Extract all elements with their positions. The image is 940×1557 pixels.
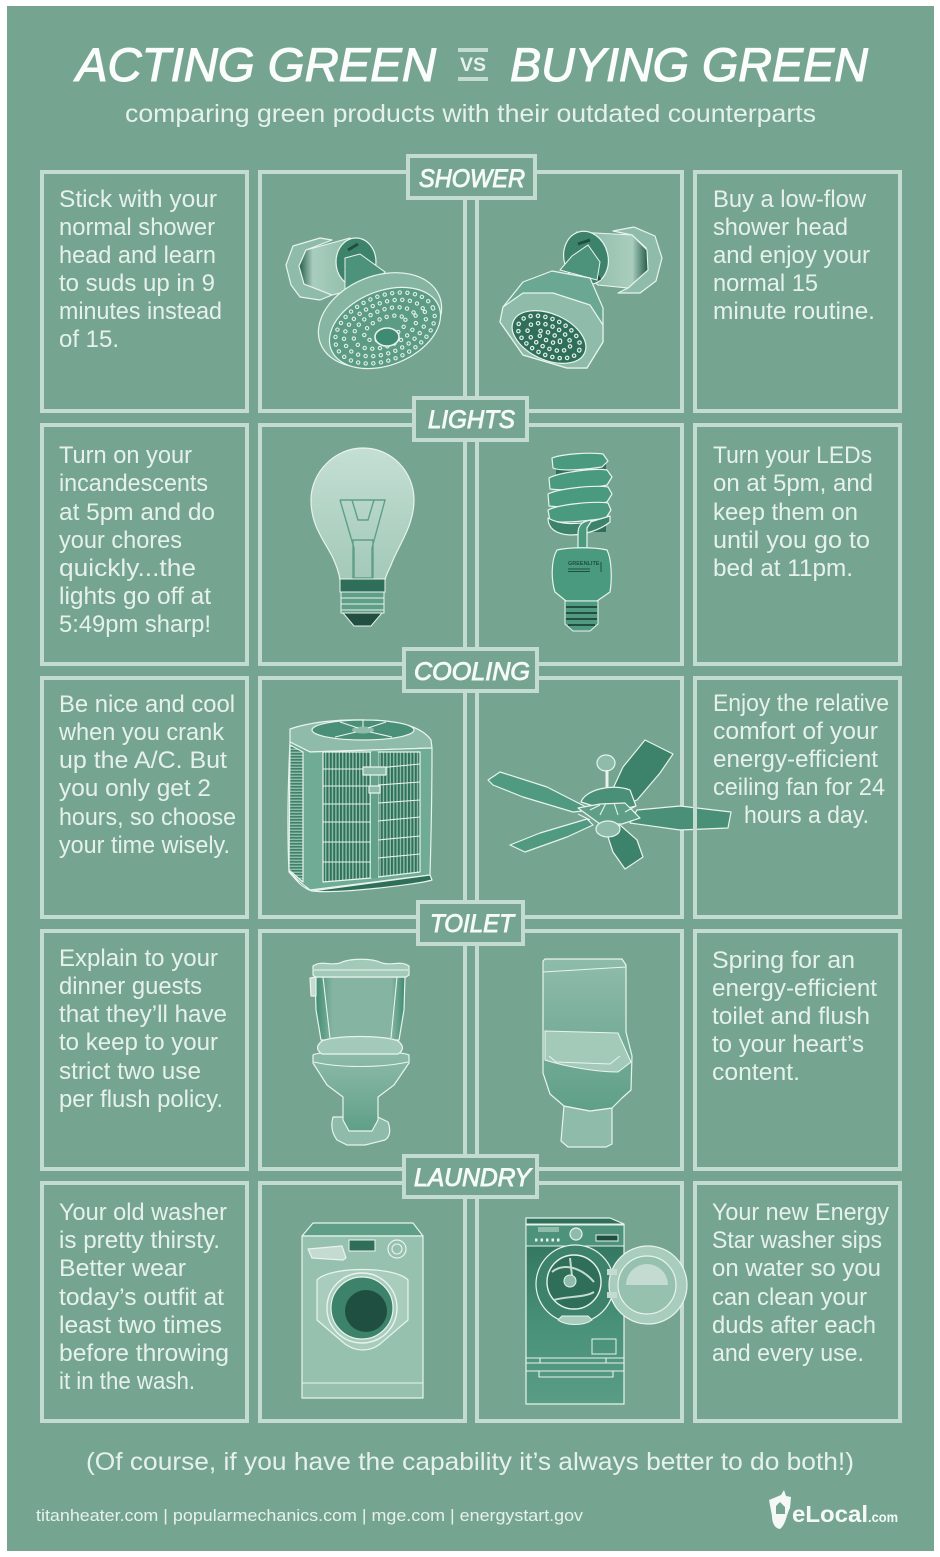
label: cooling: [404, 649, 537, 691]
panel: cooling green product: [477, 678, 731, 917]
panel: shower acting text: [42, 172, 247, 411]
icon: efficient washer with open door: [526, 1218, 687, 1404]
panel: toilet green text: to your heart’s: [712, 1031, 864, 1058]
panel: laundry acting text: today’s outfit at: [59, 1284, 224, 1311]
panel: cooling acting text: [42, 678, 247, 917]
panel: lights green text: until you go to: [713, 527, 870, 554]
icon: ceiling fan: [488, 740, 731, 869]
icon: efficient toilet: [543, 959, 632, 1147]
panel: laundry acting text: least two times: [59, 1312, 222, 1339]
logo: eLocal: .com: [868, 1510, 898, 1525]
panel: toilet acting text: [42, 931, 247, 1169]
subtitle: comparing green products with their outdated counterparts: [125, 100, 816, 128]
icon: CFL spiral bulb: GREENLITE: [568, 561, 600, 567]
panel: toilet green text: toilet and flush: [712, 1003, 870, 1030]
panel: lights acting text: incandescents: [59, 470, 208, 497]
panel: cooling green text: Enjoy the relative: [713, 690, 889, 717]
label: shower: [408, 156, 535, 198]
panel: shower green text: minute routine.: [713, 298, 875, 325]
panel: shower green text: and enjoy your: [713, 242, 870, 269]
label: toilet: TOILET: [430, 910, 516, 938]
panel: cooling acting text: hours, so choose: [59, 804, 236, 831]
label: laundry: LAUNDRY: [414, 1164, 533, 1192]
panel: toilet acting text: to keep to your: [59, 1029, 218, 1056]
panel: shower green product: [477, 172, 682, 411]
panel: shower acting text: to suds up in 9: [59, 270, 215, 297]
panel: lights acting text: lights go off at: [59, 583, 211, 610]
label: cooling: COOLING: [414, 658, 530, 686]
label: lights: LIGHTS: [428, 406, 515, 434]
panel: lights green text: keep them on: [713, 499, 858, 526]
panel: cooling acting text: your time wisely.: [59, 832, 230, 859]
panel: shower acting text: Stick with your: [59, 186, 217, 213]
panel: cooling acting text: you only get 2: [59, 775, 211, 802]
panel: shower acting text: minutes instead: [59, 298, 222, 325]
panel: shower green text: normal 15: [713, 270, 818, 297]
logo: eLocal: [769, 1490, 898, 1529]
panel: cooling green text: energy-efficient: [713, 746, 878, 773]
panel: cooling green text: ceiling fan for 24: [713, 774, 885, 801]
panel: laundry acting text: [42, 1183, 247, 1421]
panel: laundry green text: on water so you: [712, 1255, 881, 1282]
panel: cooling acting text: when you crank: [58, 719, 225, 746]
panel: laundry green text: [695, 1183, 900, 1421]
panel: toilet acting text: that they’ll have: [59, 1001, 227, 1028]
icon: low-flow shower head: [500, 226, 662, 374]
panel: toilet green text: energy-efficient: [712, 975, 877, 1002]
label: shower: SHOWER: [419, 165, 525, 193]
panel: toilet acting text: Explain to your: [59, 945, 218, 972]
panel: laundry acting text: is pretty thirsty.: [59, 1227, 220, 1254]
panel: laundry green text: duds after each: [712, 1312, 876, 1339]
panel: lights acting text: Turn on your: [59, 442, 192, 469]
panel: toilet acting text: strict two use: [59, 1058, 201, 1085]
panel: lights old product: [260, 425, 465, 664]
label: lights: [414, 398, 527, 440]
panel: shower acting text: of 15.: [59, 326, 119, 353]
panel: toilet old product: [260, 931, 465, 1169]
icon: old toilet: [310, 959, 409, 1145]
panel: laundry green text: and every use.: [712, 1340, 864, 1367]
panel: laundry acting text: before throwing: [59, 1340, 229, 1367]
title: BUYING GREEN: [510, 38, 868, 91]
panel: laundry green text: Your new Energy: [712, 1199, 889, 1226]
label: laundry: [404, 1156, 537, 1197]
panel: cooling old product: [260, 678, 465, 917]
panel: lights acting text: 5:49pm sharp!: [59, 611, 211, 638]
panel: cooling acting text: Be nice and cool: [59, 691, 235, 718]
panel: cooling acting text: up the A/C. But: [59, 747, 227, 774]
icon: old washer: [302, 1223, 423, 1398]
icon: CFL spiral bulb: [548, 453, 612, 631]
panel: laundry green text: Star washer sips: [712, 1227, 882, 1254]
panel: lights green text: bed at 11pm.: [713, 555, 853, 582]
panel: lights acting text: at 5pm and do: [59, 499, 215, 526]
icon: incandescent bulb: [311, 448, 414, 626]
panel: lights green product: [477, 425, 682, 664]
panel: shower old product: [260, 172, 465, 411]
panel: laundry acting text: Better wear: [59, 1255, 186, 1282]
panel: laundry old product: [260, 1183, 465, 1421]
panel: laundry acting text: Your old washer: [59, 1199, 227, 1226]
title: VS: [460, 55, 486, 76]
logo: eLocal: eLocal: [792, 1501, 868, 1527]
closing note: (Of course, if you have the capability it’s always better to do both!): [86, 1448, 854, 1476]
panel: laundry green text: can clean your: [712, 1284, 867, 1311]
panel: toilet green text: Spring for an: [712, 947, 855, 974]
panel: lights green text: on at 5pm, and: [713, 470, 873, 497]
panel: shower acting text: normal shower: [59, 214, 215, 241]
panel: cooling green text: [695, 678, 900, 917]
panel: lights acting text: quickly...the: [59, 555, 196, 582]
label: toilet: [418, 902, 523, 944]
panel: shower green text: Buy a low-flow: [713, 186, 867, 213]
panel: toilet green text: content.: [712, 1059, 800, 1086]
panel: lights green text: [695, 425, 900, 664]
icon: air conditioner unit: [288, 720, 432, 892]
title: ACTING GREEN: [73, 38, 436, 91]
panel: toilet green product: [477, 931, 682, 1169]
title: [73, 38, 868, 91]
panel: laundry acting text: it in the wash.: [59, 1368, 195, 1395]
panel: toilet acting text: per flush policy.: [59, 1086, 223, 1113]
panel: shower green text: shower head: [713, 214, 848, 241]
sources: titanheater.com | popularmechanics.com | mge.com | energystart.gov: [36, 1506, 584, 1525]
icon: wide shower head: [286, 238, 456, 385]
panel: laundry green product: [477, 1183, 687, 1421]
panel: shower acting text: head and learn: [59, 242, 216, 269]
panel: shower green text: [695, 172, 900, 411]
panel: cooling green text: comfort of your: [713, 718, 878, 745]
panel: lights green text: Turn your LEDs: [713, 442, 872, 469]
panel: toilet acting text: dinner guests: [59, 973, 202, 1000]
panel: cooling green text: hours a day.: [744, 802, 869, 829]
panel: lights acting text: [42, 425, 247, 664]
panel: toilet green text: [695, 931, 900, 1169]
panel: lights acting text: your chores: [59, 527, 182, 554]
